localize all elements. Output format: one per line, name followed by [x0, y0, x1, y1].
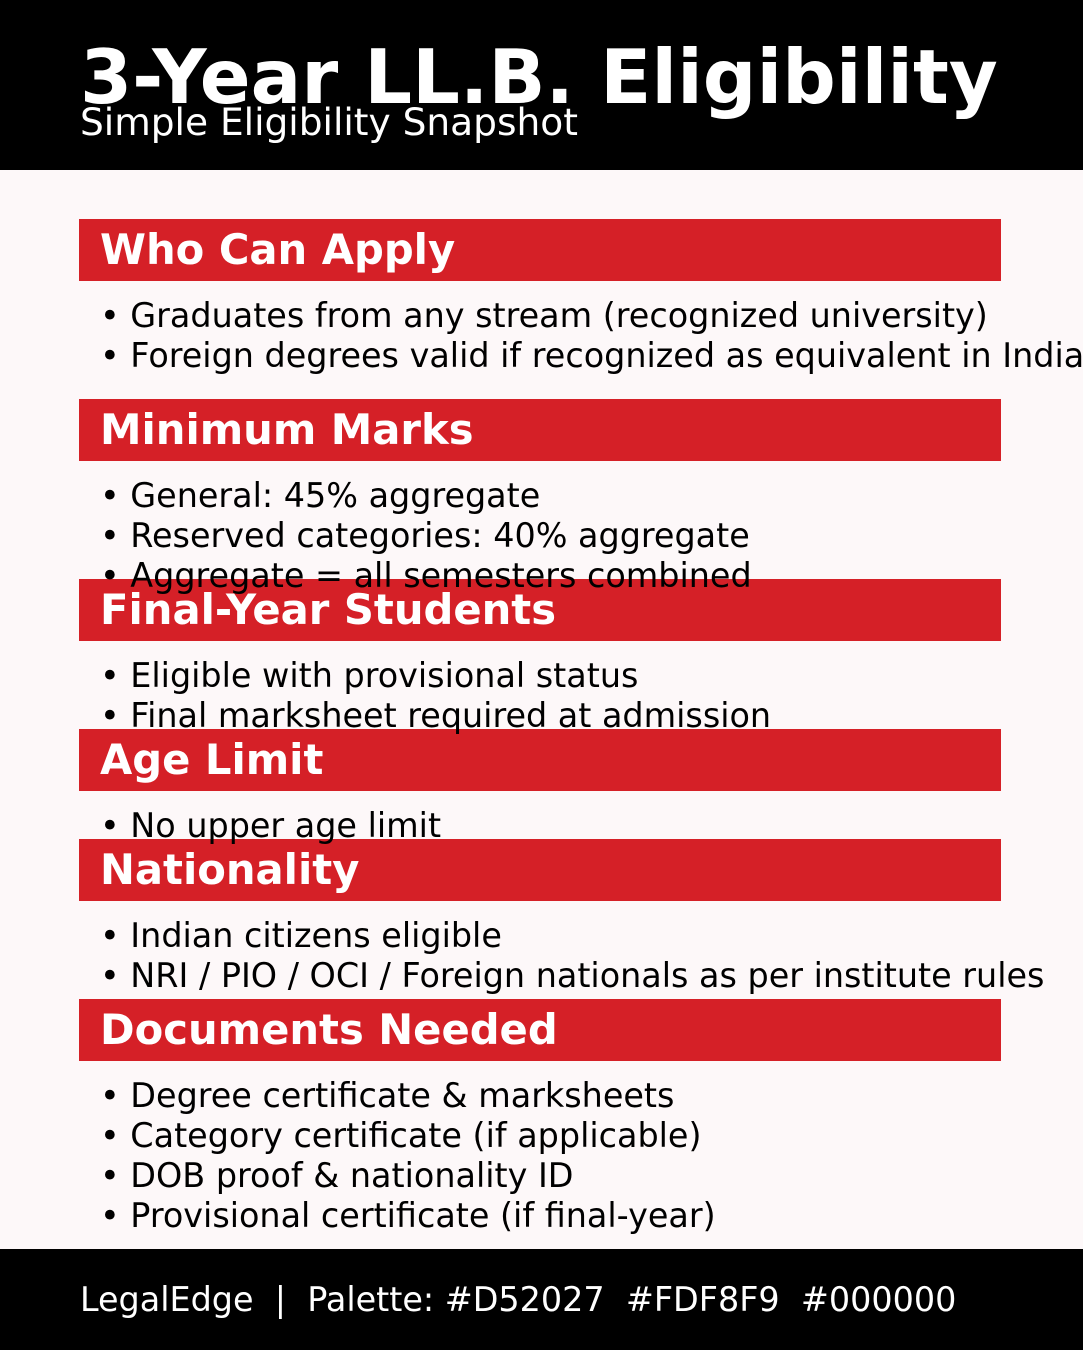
- text: nationality bullets: • NRI / PIO / OCI / Foreign nationals as per institute rules: [100, 956, 1044, 995]
- subtitle: Simple Eligibility Snapshot: [80, 100, 578, 144]
- title: 3-Year LL.B. Eligibility: [80, 33, 998, 121]
- text: final-year bullets: [100, 656, 771, 735]
- heading: who can apply: [79, 219, 1001, 281]
- text: minimum marks bullets: • Aggregate = all semesters combined: [100, 556, 752, 595]
- heading: nationality: [79, 839, 1001, 901]
- footer text: LegalEdge | Palette: #D52027 #FDF8F9 #000000: [80, 1280, 956, 1319]
- text: who can apply bullets: • Graduates from any stream (recognized university): [100, 296, 988, 335]
- footer band: [0, 1249, 1083, 1350]
- header band: [0, 0, 1083, 170]
- heading: documents needed: [79, 999, 1001, 1061]
- text: who can apply bullets: [100, 296, 1083, 375]
- text: minimum marks bullets: [100, 476, 752, 595]
- text: documents bullets: • Category certificate (if applicable): [100, 1116, 702, 1155]
- heading: age limit: Age Limit: [100, 735, 323, 784]
- heading: final-year students: Final-Year Students: [100, 585, 556, 634]
- text: nationality bullets: • Indian citizens eligible: [100, 916, 502, 955]
- heading: minimum marks: Minimum Marks: [100, 405, 474, 454]
- text: documents bullets: • Provisional certificate (if final-year): [100, 1196, 716, 1235]
- text: documents bullets: [100, 1076, 716, 1235]
- heading: documents needed: Documents Needed: [100, 1005, 558, 1054]
- heading: who can apply: Who Can Apply: [100, 225, 455, 274]
- heading: nationality: Nationality: [100, 845, 359, 894]
- text: documents bullets: • DOB proof & nationality ID: [100, 1156, 574, 1195]
- text: who can apply bullets: • Foreign degrees valid if recognized as equivalent in India: [100, 336, 1083, 375]
- text: final-year bullets: • Final marksheet required at admission: [100, 696, 771, 735]
- text: documents bullets: • Degree certificate & marksheets: [100, 1076, 674, 1115]
- text: minimum marks bullets: • General: 45% aggregate: [100, 476, 540, 515]
- heading: minimum marks: [79, 399, 1001, 461]
- heading: final-year students: [79, 579, 1001, 641]
- text: age limit bullets: • No upper age limit: [100, 806, 441, 845]
- heading: age limit: [79, 729, 1001, 791]
- text: nationality bullets: [100, 916, 1044, 995]
- text: minimum marks bullets: • Reserved categories: 40% aggregate: [100, 516, 750, 555]
- text: final-year bullets: • Eligible with provisional status: [100, 656, 638, 695]
